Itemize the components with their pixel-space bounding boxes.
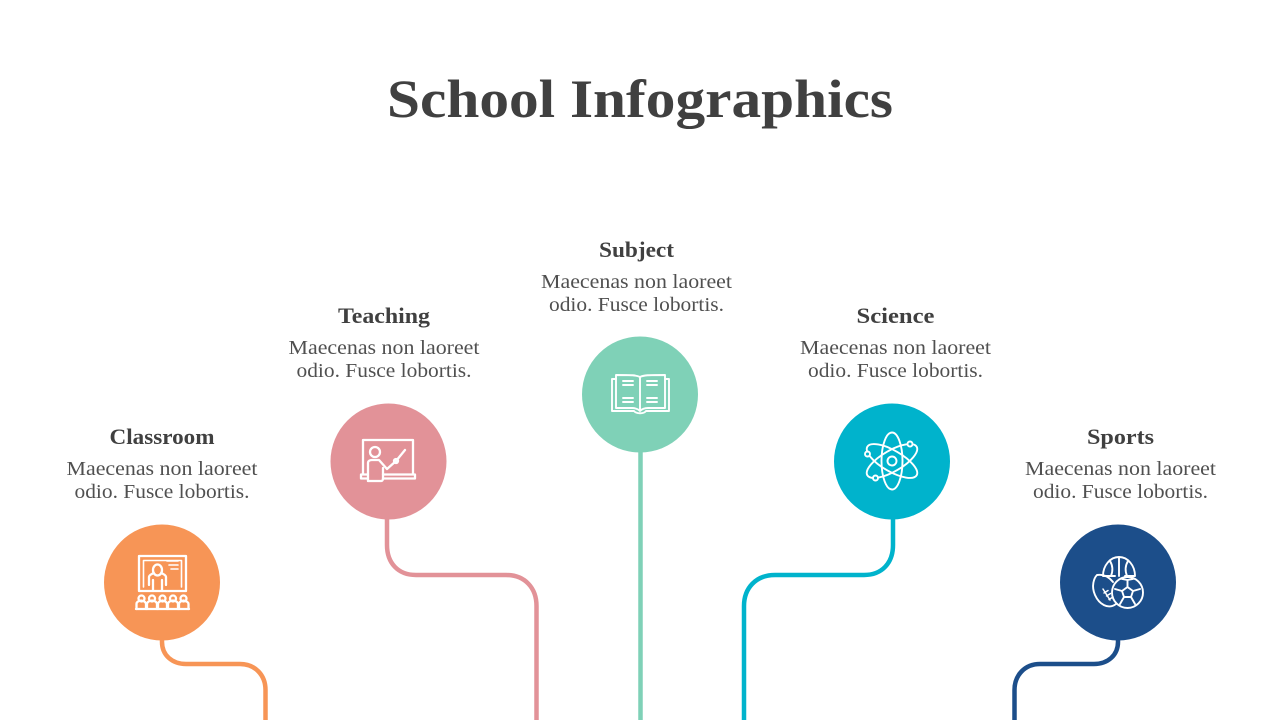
panel: science	[744, 303, 991, 720]
circle: subject	[582, 336, 698, 452]
panel: sports: odio. Fusce lobortis.	[1033, 481, 1208, 503]
heading: classroom: Classroom	[110, 424, 215, 449]
panel: teaching: odio. Fusce lobortis.	[296, 360, 472, 382]
panel: science: odio. Fusce lobortis.	[808, 360, 983, 382]
text: teaching: Maecenas non laoreet	[288, 337, 480, 359]
circle: classroom	[104, 524, 220, 640]
connector: classroom	[162, 638, 266, 720]
text: science: Maecenas non laoreet	[800, 337, 991, 359]
heading: teaching: Teaching	[338, 303, 431, 328]
circle: sports	[1060, 524, 1176, 640]
title: School Infographics	[387, 69, 893, 129]
connector: science	[744, 516, 893, 720]
text: classroom: Maecenas non laoreet	[66, 458, 258, 480]
panel: teaching	[288, 303, 536, 720]
heading: subject: Subject	[599, 237, 675, 262]
circle: teaching	[330, 404, 446, 520]
panel: subject: odio. Fusce lobortis.	[549, 294, 724, 316]
text: sports: Maecenas non laoreet	[1025, 458, 1216, 480]
heading: science: Science	[856, 303, 935, 328]
icon: teacher at board	[361, 440, 415, 481]
heading: sports: Sports	[1087, 424, 1154, 449]
connector: teaching	[387, 516, 536, 720]
text: subject: Maecenas non laoreet	[541, 271, 732, 293]
icon: sports balls	[1093, 557, 1143, 608]
panel: classroom	[66, 424, 266, 720]
connector: sports	[1014, 638, 1118, 720]
panel: sports	[1014, 424, 1216, 720]
icon: atom	[862, 432, 922, 490]
panel: classroom: odio. Fusce lobortis.	[74, 481, 250, 503]
icon: teacher with audience	[136, 556, 189, 609]
circle: science	[834, 404, 950, 520]
panel: subject	[541, 237, 732, 720]
icon: open book	[612, 375, 669, 413]
connector: subject	[638, 448, 643, 720]
